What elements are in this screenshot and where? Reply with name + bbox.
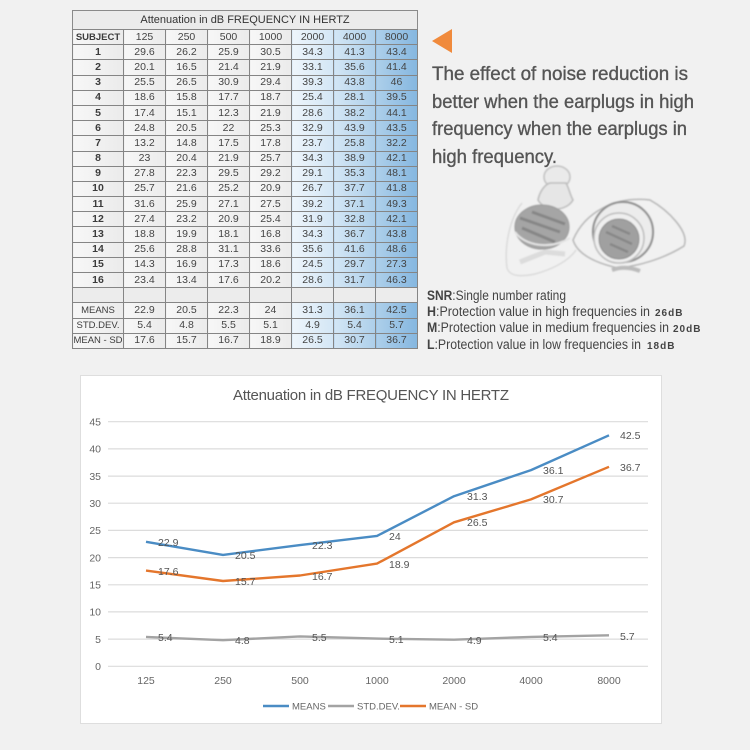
attenuation data table: 16.5 [176,61,197,73]
attenuation data table: 25.5 [134,76,155,88]
attenuation data table: 16.8 [260,228,281,240]
attenuation data table: 500 [220,31,237,43]
attenuation data table: 42.1 [386,152,407,164]
attenuation data table: 13.4 [176,274,197,286]
attenuation data table: 20.2 [260,274,281,286]
attenuation data table: MEANS [81,305,115,316]
definitions text block: 18dB [647,341,675,352]
attenuation data table: 16.9 [176,258,197,270]
attenuation data table: 24.8 [134,122,155,134]
attenuation data table: 17.4 [134,107,155,119]
attenuation data table: 21.9 [218,152,239,164]
attenuation data table: 13 [92,228,104,240]
x axis labels: 1000 [365,675,389,687]
attenuation data table: 25.7 [134,182,155,194]
heading text: frequency when the earplugs in [432,119,687,140]
data labels: 18.9 [389,559,410,571]
attenuation data table: 18.6 [134,91,155,103]
attenuation data table: 24.5 [302,258,323,270]
attenuation data table: 33.1 [302,61,323,73]
x axis labels: 2000 [442,675,466,687]
attenuation data table: 35.6 [302,243,323,255]
attenuation data table: 17.7 [218,91,239,103]
attenuation data table: 25.3 [260,122,281,134]
definitions text block: 26dB [655,308,683,319]
attenuation data table: 20.1 [134,61,155,73]
attenuation data table: 14.8 [176,137,197,149]
attenuation data table: 22.3 [176,167,197,179]
data labels: 5.4 [543,632,558,644]
attenuation data table: 17.3 [218,258,239,270]
attenuation data table: 32.9 [302,122,323,134]
data labels: 4.9 [467,635,482,647]
attenuation data table: 28.8 [176,243,197,255]
data labels: 5.7 [620,631,635,643]
icon: orange arrow [432,29,452,53]
attenuation data table: STD.DEV. [77,320,119,331]
attenuation data table: 39.2 [302,198,323,210]
attenuation data table: 21.9 [260,61,281,73]
attenuation data table: 20.5 [176,304,197,316]
attenuation data table: 31.1 [218,243,239,255]
attenuation data table: 17.6 [218,274,239,286]
attenuation data table: 46 [391,76,402,88]
gridlines and y axis: 40 [89,444,101,456]
attenuation data table: 41.3 [344,46,365,58]
definitions text block: L:Protection value in low frequencies in [427,337,641,352]
panel: line chart [80,376,662,724]
gridlines and y axis: 35 [89,471,101,483]
attenuation data table: 30.9 [218,76,239,88]
legend: STD.DEV. [357,702,400,712]
data labels: 5.1 [389,634,404,646]
data labels: 4.8 [235,635,250,647]
attenuation data table: 33.6 [260,243,281,255]
attenuation data table: 4.9 [305,319,320,331]
attenuation data table: 20.9 [218,213,239,225]
attenuation data table: 26.5 [176,76,197,88]
attenuation data table: 32.2 [386,137,407,149]
attenuation data table: 28.6 [302,107,323,119]
attenuation data table: 41.4 [386,61,407,73]
attenuation data table: 42.5 [386,304,407,316]
legend [263,702,478,712]
attenuation data table: 11 [92,198,104,210]
attenuation data table: 24 [265,304,276,316]
definitions text block: H:Protection value in high frequencies in [427,304,650,319]
attenuation data table: 21.6 [176,182,197,194]
attenuation data table: 27.8 [134,167,155,179]
attenuation data table: 25.7 [260,152,281,164]
series: MEAN - SD [146,467,609,581]
attenuation data table: 14 [92,243,104,255]
data labels: 16.7 [312,571,333,583]
x axis labels: 125 [137,675,155,687]
attenuation data table: 43.4 [386,46,407,58]
attenuation data table: 21.9 [260,107,281,119]
attenuation data table: 29.6 [134,46,155,58]
data labels: 36.1 [543,465,564,477]
attenuation data table: 28.6 [302,274,323,286]
attenuation data table: 34.3 [302,152,323,164]
attenuation data table: 5 [95,107,101,119]
attenuation data table: 16 [92,274,104,286]
attenuation data table: 4000 [343,31,366,43]
attenuation data table: 15 [92,258,104,270]
attenuation data table: 46.3 [386,274,407,286]
table frame [72,10,418,349]
attenuation data table: 43.5 [386,122,407,134]
illustration: earplugs sketch [506,166,685,276]
gridlines and y axis: 5 [95,634,101,646]
attenuation data table: 20.5 [176,122,197,134]
attenuation data table: 25.4 [302,91,323,103]
attenuation data table: SUBJECT [76,32,120,43]
attenuation data table: 29.5 [218,167,239,179]
attenuation data table: 12 [92,213,104,225]
attenuation data table: 34.3 [302,46,323,58]
definitions text block: 20dB [673,324,701,335]
data labels [158,430,641,647]
attenuation data table: 15.1 [176,107,197,119]
attenuation data table: 37.7 [344,182,365,194]
attenuation data table: 5.4 [347,319,362,331]
attenuation data table: 125 [136,31,153,43]
attenuation data table: 25.9 [218,46,239,58]
definitions text block: SNR:Single number rating [427,288,566,303]
gridlines and y axis: 25 [89,525,101,537]
data labels: 36.7 [620,462,641,474]
attenuation data table: 30.7 [344,334,365,346]
attenuation data table: 18.9 [260,334,281,346]
gridlines and y axis: 15 [89,580,101,592]
gridlines and y axis: 30 [89,498,101,510]
x axis labels: 8000 [597,675,621,687]
attenuation data table: 26.7 [302,182,323,194]
x axis labels: 250 [214,675,232,687]
attenuation data table: 5.7 [389,319,404,331]
attenuation data table: 4 [95,91,101,103]
attenuation data table: 31.7 [344,274,365,286]
attenuation data table: 29.7 [344,258,365,270]
data labels: 17.6 [158,566,179,578]
attenuation data table: 12.3 [218,107,239,119]
attenuation data table: 27.3 [386,258,407,270]
attenuation data table: 5.1 [263,319,278,331]
attenuation data table: 18.6 [260,258,281,270]
attenuation data table: 18.7 [260,91,281,103]
attenuation data table: 23.7 [302,137,323,149]
heading text: The effect of noise reduction is [432,64,688,85]
data labels: 26.5 [467,517,488,529]
attenuation data table: 2000 [301,31,324,43]
attenuation data table: 25.2 [218,182,239,194]
attenuation data table: 13.2 [134,137,155,149]
x axis labels [137,675,621,687]
attenuation data table: 26.5 [302,334,323,346]
attenuation data table: 26.2 [176,46,197,58]
attenuation data table: 20.4 [176,152,197,164]
attenuation data table: 5.5 [221,319,236,331]
attenuation data table: 17.6 [134,334,155,346]
attenuation data table: 48.1 [386,167,407,179]
attenuation data table: 35.3 [344,167,365,179]
attenuation data table: 1000 [259,31,282,43]
attenuation data table: 20.9 [260,182,281,194]
series: STD.DEV. [146,635,609,640]
attenuation data table: 27.4 [134,213,155,225]
attenuation data table: 36.7 [386,334,407,346]
gridlines and y axis: 10 [89,607,101,619]
attenuation data table: 28.1 [344,91,365,103]
attenuation data table: 15.7 [176,334,197,346]
attenuation data table: 35.6 [344,61,365,73]
attenuation data table: 23 [139,152,150,164]
attenuation data table: 32.8 [344,213,365,225]
attenuation data table: 36.7 [344,228,365,240]
table title: Attenuation in dB FREQUENCY IN HERTZ [140,14,350,26]
attenuation data table: 2 [95,61,101,73]
attenuation data table: 14.3 [134,258,155,270]
data labels: 22.3 [312,540,333,552]
legend: MEAN - SD [429,702,478,712]
attenuation data table: 9 [95,167,101,179]
attenuation data table: 39.5 [386,91,407,103]
attenuation data table: 22 [223,122,234,134]
attenuation data table: 31.6 [134,198,155,210]
attenuation data table: 4.8 [179,319,194,331]
gridlines and y axis [89,416,648,673]
chart title: Attenuation in dB FREQUENCY IN HERTZ [233,387,509,404]
attenuation data table: 5.4 [137,319,152,331]
series: MEANS [146,435,609,555]
attenuation data table: 43.8 [386,228,407,240]
attenuation data table: 17.5 [218,137,239,149]
attenuation data table: 31.9 [302,213,323,225]
attenuation data table: 38.9 [344,152,365,164]
attenuation data table: 48.6 [386,243,407,255]
data labels: 20.5 [235,550,256,562]
attenuation data table: 38.2 [344,107,365,119]
definitions text block: M:Protection value in medium frequencies in [427,320,669,335]
attenuation data table: 43.9 [344,122,365,134]
attenuation data table: 15.8 [176,91,197,103]
attenuation data table: 27.1 [218,198,239,210]
attenuation data table: 3 [95,76,101,88]
attenuation data table: 41.8 [386,182,407,194]
attenuation data table: 42.1 [386,213,407,225]
x axis labels: 500 [291,675,309,687]
attenuation data table: 23.4 [134,274,155,286]
data labels: 42.5 [620,430,641,442]
attenuation data table: 31.3 [302,304,323,316]
data labels: 30.7 [543,494,564,506]
attenuation data table: 29.4 [260,76,281,88]
data labels: 15.7 [235,576,256,588]
attenuation data table: 25.4 [260,213,281,225]
attenuation data table: 16.7 [218,334,239,346]
data labels: 31.3 [467,491,488,503]
attenuation data table: MEAN - SD [73,335,123,346]
x axis labels: 4000 [519,675,543,687]
data labels: 5.5 [312,632,327,644]
attenuation data table: 43.8 [344,76,365,88]
attenuation data table: 29.2 [260,167,281,179]
definitions text block [427,288,701,352]
legend: MEANS [292,702,326,712]
data labels: 22.9 [158,537,179,549]
attenuation data table: 36.1 [344,304,365,316]
attenuation data table: 23.2 [176,213,197,225]
attenuation data table: 19.9 [176,228,197,240]
attenuation data table: 49.3 [386,198,407,210]
attenuation data table: 22.9 [134,304,155,316]
attenuation data table: 44.1 [386,107,407,119]
heading text [432,64,694,168]
attenuation data table: 29.1 [302,167,323,179]
attenuation data table: 17.8 [260,137,281,149]
attenuation data table: 10 [92,182,104,194]
attenuation data table: 18.8 [134,228,155,240]
attenuation data table: 30.5 [260,46,281,58]
attenuation data table: 34.3 [302,228,323,240]
gridlines and y axis: 20 [89,552,101,564]
attenuation data table: 22.3 [218,304,239,316]
attenuation data table [73,29,417,348]
heading text: high frequency. [432,147,557,168]
data labels: 5.4 [158,632,173,644]
attenuation data table: 6 [95,122,101,134]
attenuation data table: 18.1 [218,228,239,240]
attenuation data table: 25.8 [344,137,365,149]
attenuation data table: 27.5 [260,198,281,210]
attenuation data table: 25.9 [176,198,197,210]
attenuation data table: 250 [178,31,195,43]
attenuation data table: 37.1 [344,198,365,210]
attenuation data table: 8 [95,152,101,164]
chart background [80,376,662,724]
attenuation data table: 21.4 [218,61,239,73]
gridlines and y axis: 45 [89,416,101,428]
attenuation data table: 39.3 [302,76,323,88]
attenuation data table: 8000 [385,31,408,43]
data labels: 24 [389,531,401,543]
attenuation data table: 1 [95,46,101,58]
gridlines and y axis: 0 [95,661,101,673]
attenuation data table: 25.6 [134,243,155,255]
heading text: better when the earplugs in high [432,92,694,113]
attenuation data table: 7 [95,137,101,149]
attenuation data table: 41.6 [344,243,365,255]
